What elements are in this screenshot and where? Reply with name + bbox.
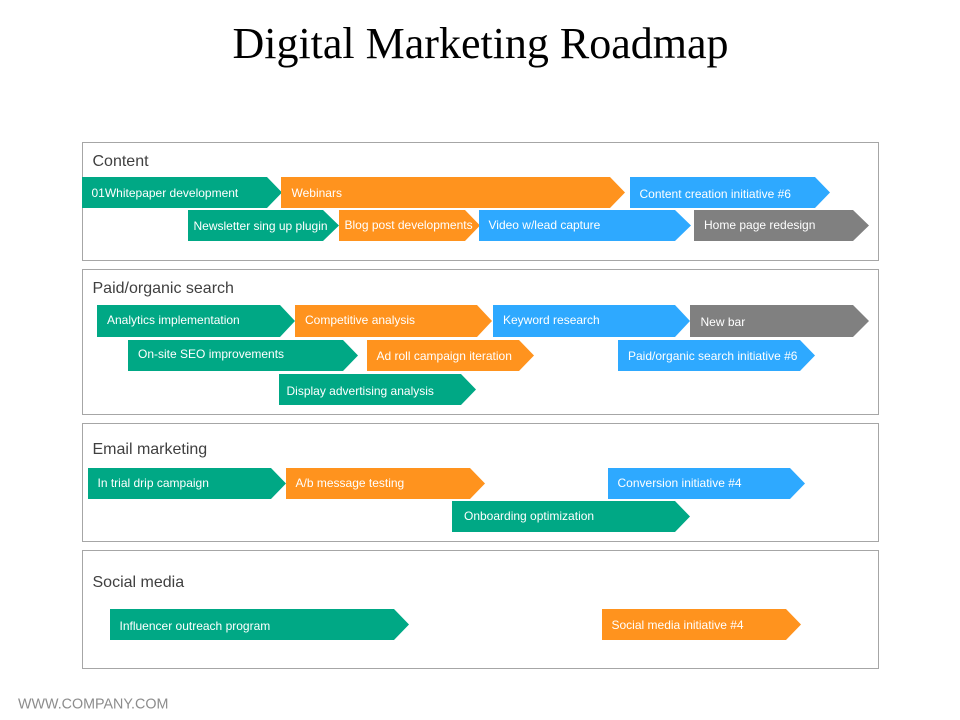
bar: video with lead capture: Video w/lead capture <box>488 218 601 232</box>
bar: content creation initiative <box>630 177 830 208</box>
panel: email marketing <box>82 424 878 542</box>
panel: paid/organic search <box>82 270 878 414</box>
bar: onboarding optimization <box>452 501 690 532</box>
bar: ad roll campaign iteration <box>367 340 534 371</box>
bar: analytics implementation <box>97 305 295 337</box>
bar: conversion initiative <box>608 468 805 499</box>
bar: keyword research: Keyword research <box>503 313 600 327</box>
bar: conversion initiative: Conversion initiative #4 <box>618 476 742 490</box>
heading: paid/organic search: Paid/organic search <box>92 280 234 297</box>
title: Digital Marketing Roadmap <box>232 19 729 68</box>
heading: content: Content <box>92 153 149 170</box>
heading: email marketing: Email marketing <box>92 441 207 458</box>
bar: display advertising analysis: Display advertising analysis <box>286 384 434 398</box>
panel: content <box>82 142 878 260</box>
bar: on-site SEO improvements: On-site SEO improvements <box>138 347 284 361</box>
panel: social media <box>82 550 878 668</box>
bar: influencer outreach program <box>110 609 409 640</box>
bar: blog post developments <box>339 210 480 241</box>
bar: paid/organic search initiative <box>618 340 815 371</box>
bar: whitepaper development <box>82 177 282 208</box>
footer: website: WWW.COMPANY.COM <box>18 696 168 712</box>
bar: webinars: Webinars <box>292 186 342 200</box>
bar: in trial drip campaign <box>88 468 286 499</box>
bar: competitive analysis <box>295 305 492 337</box>
bar: whitepaper development: 01Whitepaper development <box>92 186 239 200</box>
bar: a/b message testing: A/b message testing <box>296 476 404 490</box>
bar: keyword research <box>493 305 690 337</box>
bar: social media initiative: Social media initiative #4 <box>612 618 744 632</box>
bar: new bar <box>690 305 869 337</box>
bar: paid/organic search initiative: Paid/organic search initiative #6 <box>628 349 798 363</box>
bar: display advertising analysis <box>279 374 476 405</box>
bar: new bar: New bar <box>700 315 745 329</box>
bar: newsletter sign up plugin <box>188 210 339 241</box>
bar: on-site SEO improvements <box>128 340 358 371</box>
bar: blog post developments: Blog post developments <box>344 218 473 232</box>
bar: social media initiative <box>602 609 801 640</box>
bar: competitive analysis: Competitive analysis <box>305 313 415 327</box>
bar: video with lead capture <box>479 210 691 241</box>
bar: content creation initiative: Content creation initiative #6 <box>640 187 791 201</box>
bar: onboarding optimization: Onboarding optimization <box>464 509 594 523</box>
bar: home page redesign <box>694 210 869 241</box>
heading: social media: Social media <box>92 574 184 591</box>
bar: influencer outreach program: Influencer outreach program <box>120 619 270 633</box>
bar: webinars <box>281 177 625 208</box>
bar: home page redesign: Home page redesign <box>704 218 815 232</box>
bar: ad roll campaign iteration: Ad roll campaign iteration <box>376 349 512 363</box>
bar: in trial drip campaign: In trial drip campaign <box>98 476 209 490</box>
bar: a/b message testing <box>286 468 485 499</box>
bar: analytics implementation: Analytics implementation <box>107 313 240 327</box>
bar: newsletter sign up plugin: Newsletter sing up plugin <box>194 219 328 233</box>
